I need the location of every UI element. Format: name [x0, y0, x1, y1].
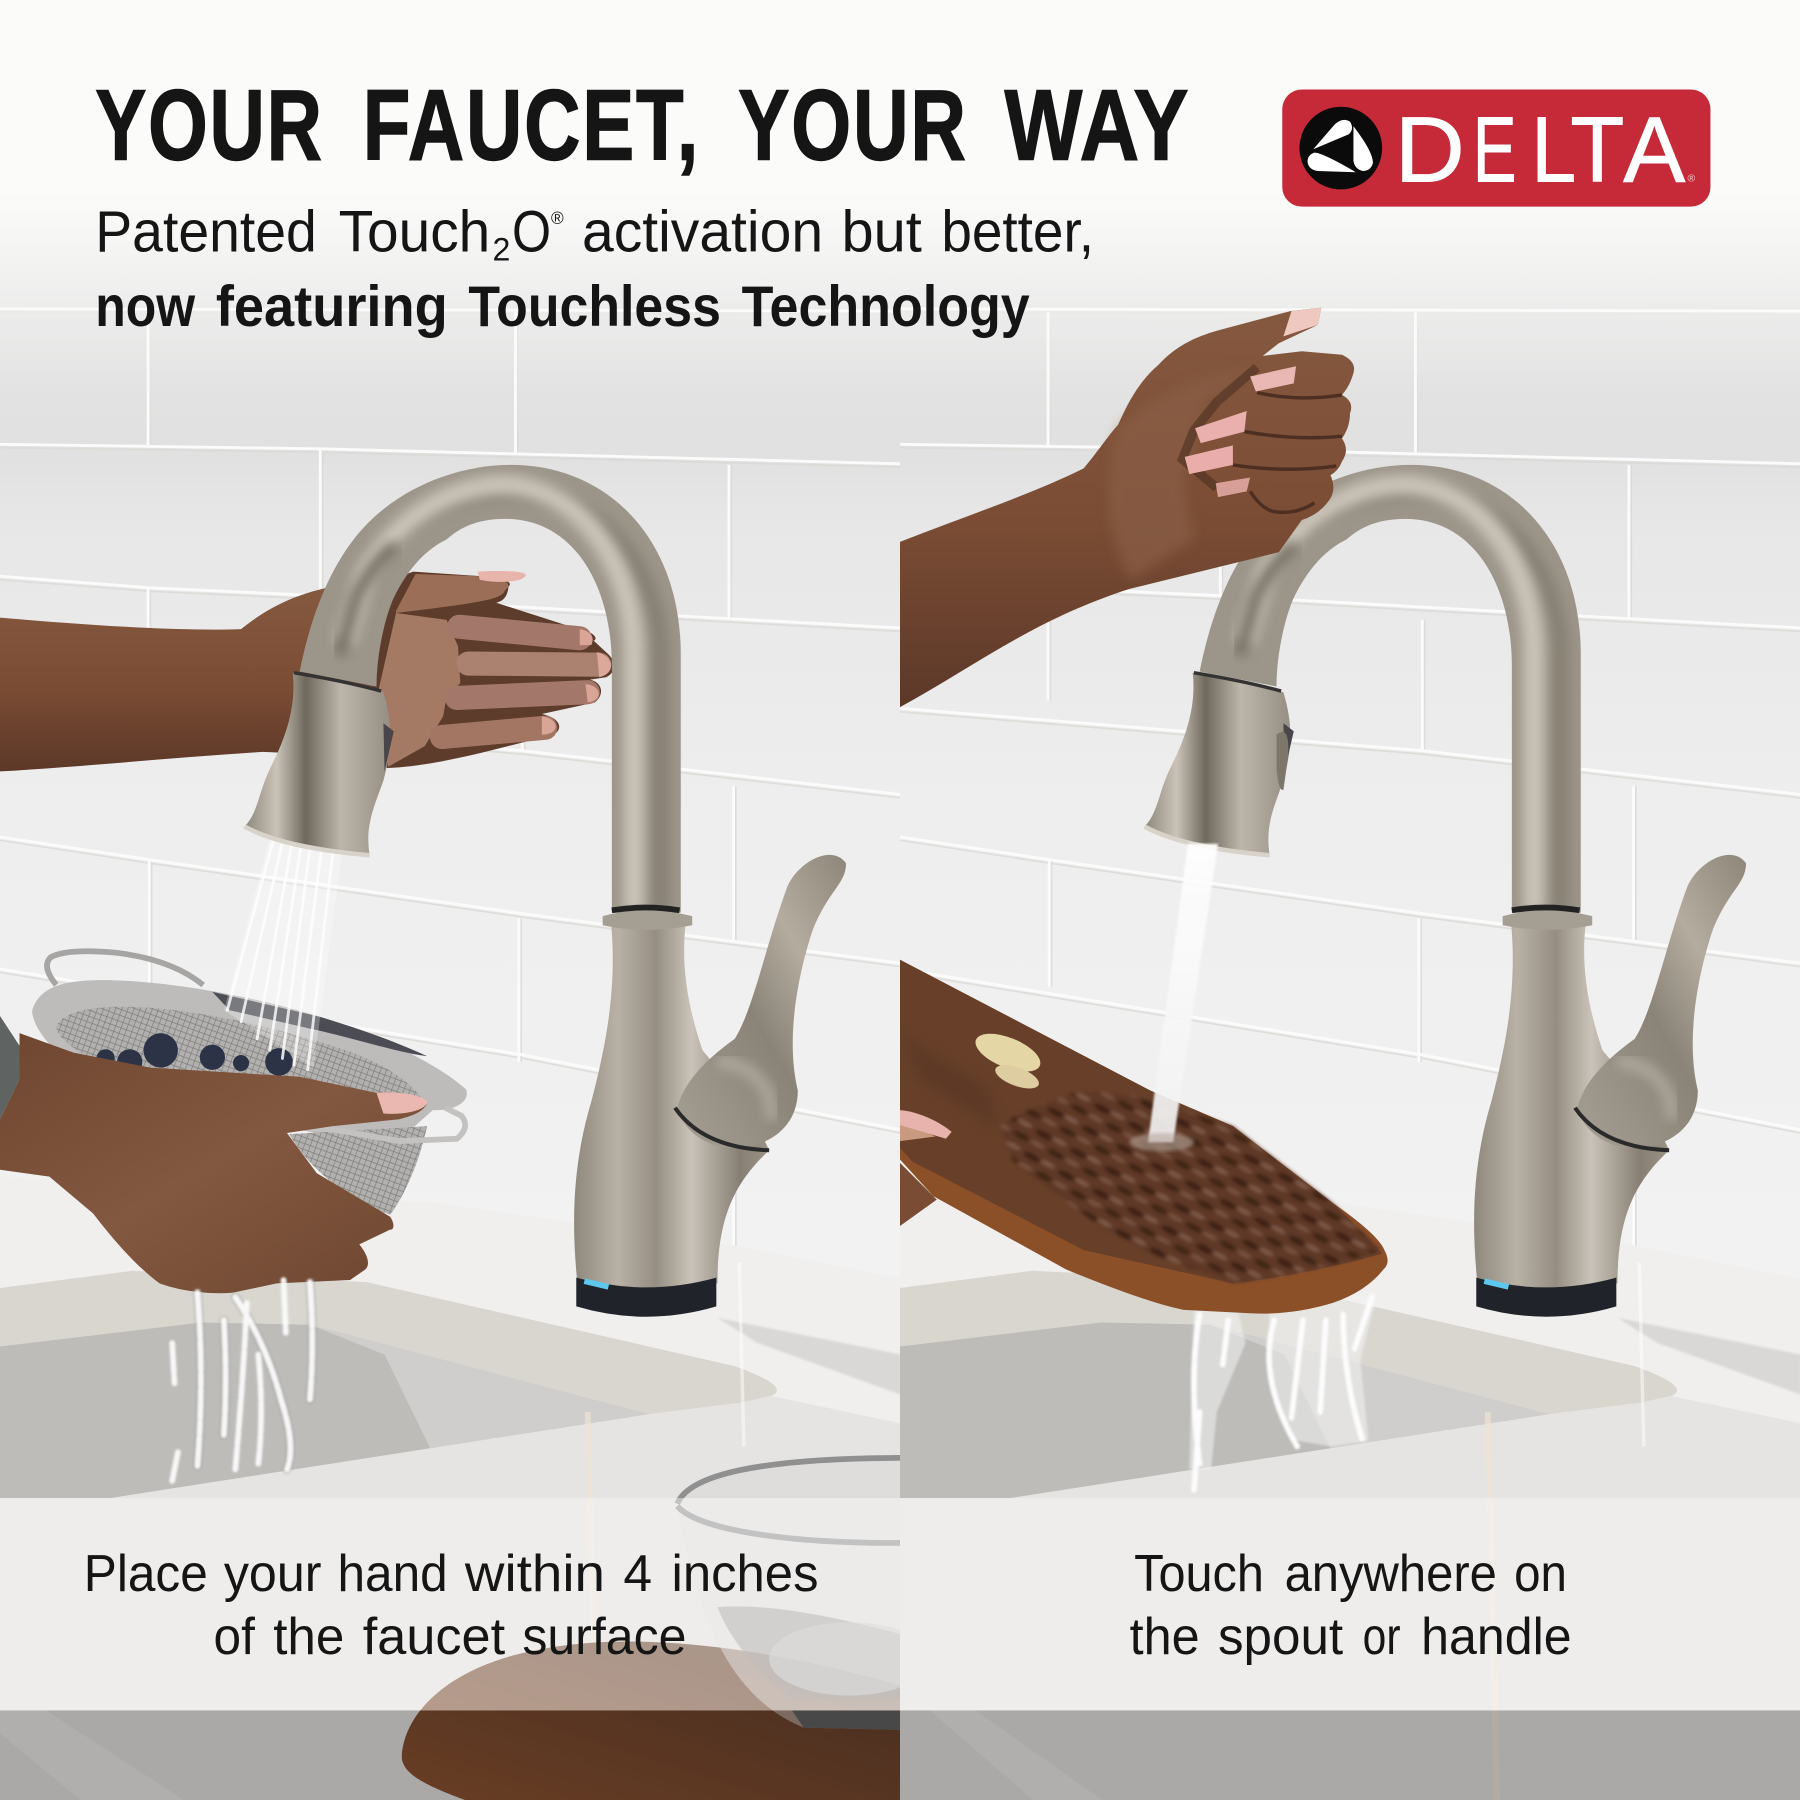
caption: right: handle: [1421, 1607, 1572, 1665]
tiled wall, counter and sink background: [0, 260, 900, 1800]
caption: left: inches: [672, 1544, 818, 1602]
subtitle line 2: now: [95, 275, 195, 339]
subtitle line 1: 2: [492, 232, 510, 268]
panel: right photo: [900, 260, 1800, 1800]
fingers holding board: [900, 1110, 952, 1226]
title: YOUR: [95, 71, 324, 182]
logo: Delta: T: [1570, 97, 1624, 201]
subtitle line 1: [95, 199, 1094, 268]
caption: right: or: [1363, 1607, 1401, 1665]
caption: right: spout: [1218, 1607, 1343, 1665]
water spray from faucet head: [224, 838, 342, 1070]
caption: left: [84, 1544, 818, 1665]
caption band: left: [0, 1498, 900, 1710]
tiled wall, counter and sink background: [900, 260, 1800, 1800]
caption: left: your: [224, 1544, 321, 1602]
water pooling on board: [1000, 1092, 1381, 1283]
caption: left: 4: [623, 1544, 652, 1602]
subtitle line 1: ®: [551, 208, 564, 228]
water stream: [1148, 844, 1218, 1142]
top white fade: [0, 0, 1800, 459]
title: [95, 71, 1190, 182]
caption: right: the: [1130, 1607, 1200, 1665]
strainer with blueberries: [32, 951, 467, 1215]
title: WAY: [1004, 71, 1190, 182]
icon: delta three-petal mark: [1308, 120, 1373, 172]
glass bowl: [677, 1458, 930, 1730]
caption: left: Place: [84, 1544, 208, 1602]
subtitle line 1: O: [512, 199, 551, 264]
subtitle line 2: Touchless: [468, 275, 721, 339]
wooden cutting board: [900, 960, 1388, 1314]
subtitle line 2: featuring: [216, 275, 448, 339]
bottom strip shade: [0, 1710, 1800, 1800]
logo: Delta: A: [1623, 97, 1685, 201]
subtitle line 2: Technology: [742, 275, 1030, 339]
caption: right: anywhere: [1285, 1544, 1497, 1602]
arm and open hand near spout: [0, 571, 614, 771]
subtitle line 1: Patented: [95, 199, 317, 264]
caption: right: Touch: [1134, 1544, 1264, 1602]
subtitle line 1: activation: [582, 199, 823, 264]
spray button on head: [1277, 732, 1288, 790]
caption: right: [1130, 1544, 1572, 1665]
subtitle line 1: but: [841, 199, 922, 264]
title: YOUR: [738, 71, 968, 182]
left faucet: [245, 465, 846, 1317]
banana slices: [976, 1034, 1040, 1088]
title: FAUCET,: [363, 71, 700, 182]
arm and hand touching spout: [900, 308, 1354, 707]
blurred wooden board on counter: [402, 1641, 907, 1800]
caption: right: on: [1514, 1544, 1567, 1602]
subtitle line 1: Touch: [339, 199, 490, 264]
caption: left: within: [464, 1544, 605, 1602]
caption: left: faucet: [363, 1607, 505, 1665]
falling water under board: [1189, 1291, 1378, 1492]
logo: Delta: E: [1473, 97, 1516, 201]
caption: left: of: [214, 1607, 255, 1665]
faucet: [1145, 465, 1746, 1317]
caption: left: hand: [338, 1544, 448, 1602]
caption: left: surface: [522, 1607, 686, 1665]
caption: left: the: [273, 1607, 344, 1665]
logo: Delta: ®: [1688, 173, 1696, 184]
caption band: right: [900, 1498, 1800, 1710]
logo: Delta: L: [1531, 97, 1576, 201]
subtitle line 2: [95, 275, 1030, 339]
falling water droplets: [172, 1280, 312, 1481]
hand holding strainer: [0, 1016, 428, 1293]
splash on board: [1130, 1133, 1194, 1151]
logo: Delta: D: [1395, 97, 1465, 201]
logo: Delta: [1282, 90, 1710, 207]
panel: left photo: [0, 260, 900, 1800]
subtitle line 1: better,: [941, 199, 1094, 264]
